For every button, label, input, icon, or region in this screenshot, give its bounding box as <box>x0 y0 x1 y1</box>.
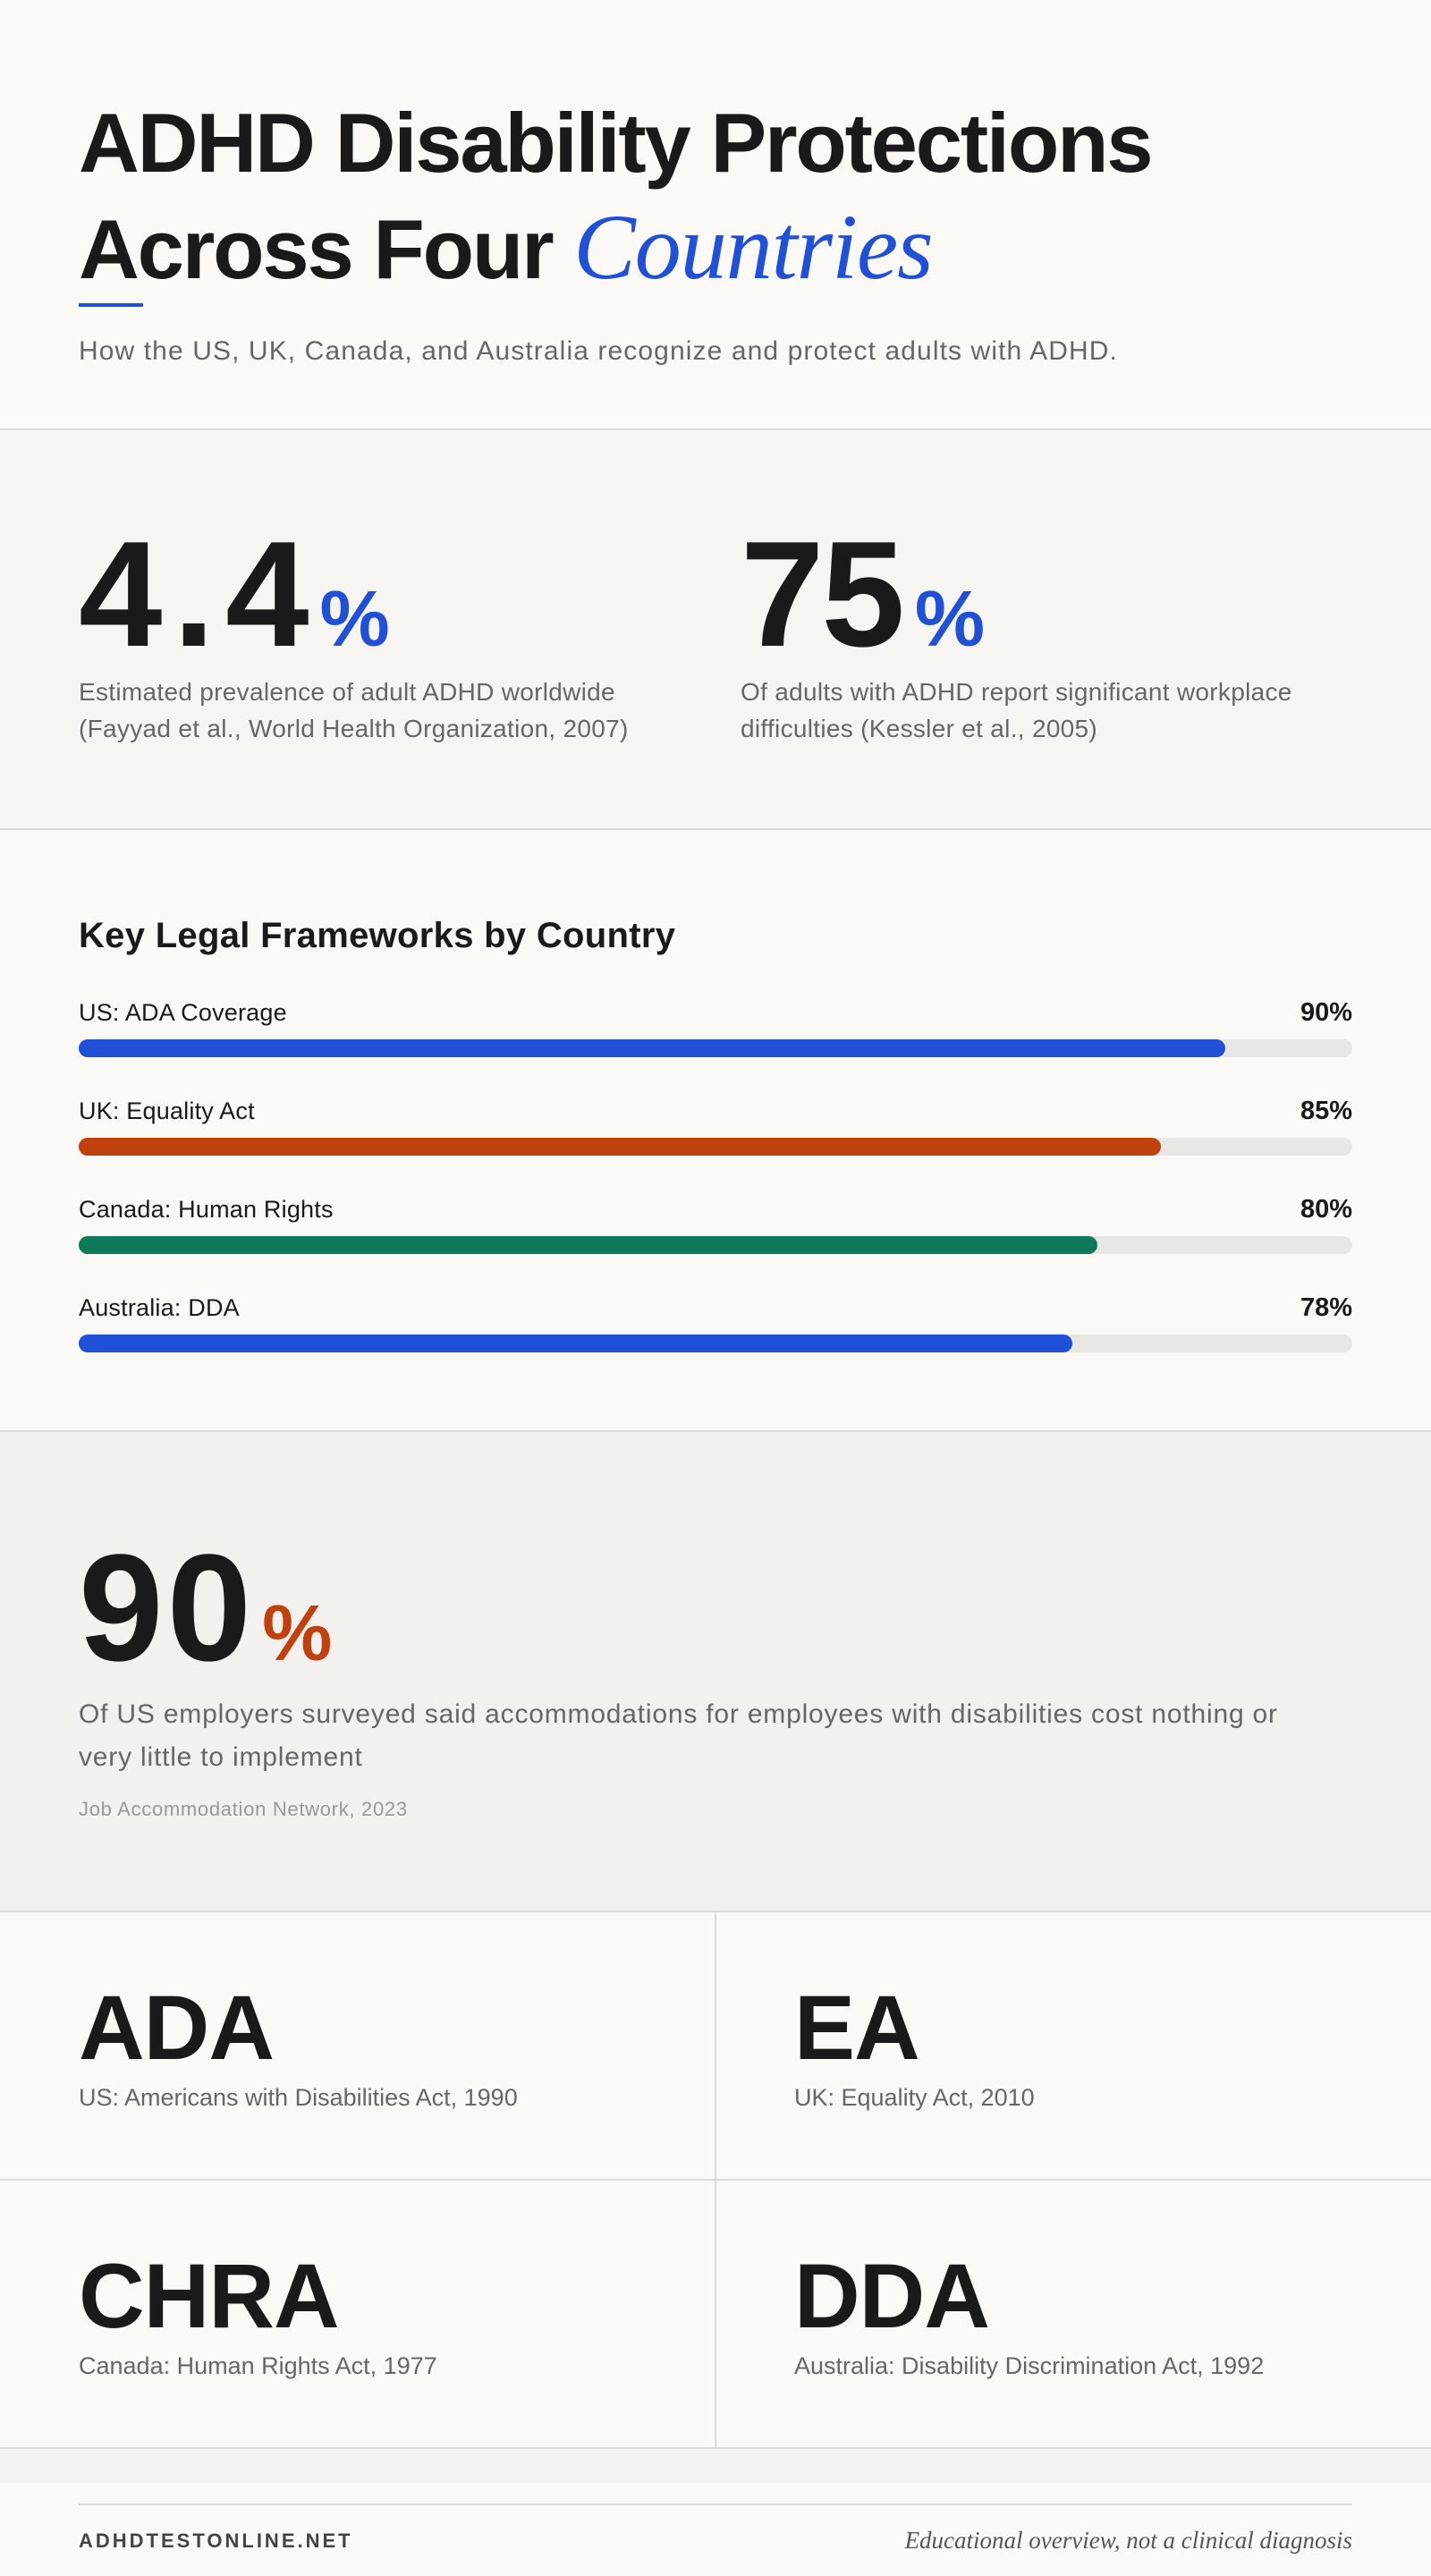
card: ADA <box>79 1977 518 2111</box>
card: CHRA: Canada: Human Rights Act, 1977 <box>79 2352 437 2379</box>
card: ADA: US: Americans with Disabilities Act, 1990 <box>79 2084 518 2111</box>
callout: 90% employers <box>79 1523 1278 1820</box>
bar: Australia DDA: Australia: DDA <box>79 1294 240 1321</box>
card: EA <box>794 1977 1035 2111</box>
card: DDA <box>794 2245 1264 2379</box>
card: DDA: DDA <box>794 2245 989 2347</box>
bar: Canada Human Rights: 80% <box>1300 1195 1352 1224</box>
callout: 90% employers: Of US employers surveyed said accommodations for employees with disabilities cost nothing or <box>79 1699 1278 1729</box>
bar: US ADA: US: ADA Coverage <box>79 999 287 1026</box>
card: CHRA <box>79 2245 437 2379</box>
card: EA: UK: Equality Act, 2010 <box>794 2084 1035 2111</box>
title: ADHD Disability Protections <box>79 96 1151 190</box>
card: DDA: Australia: Disability Discrimination Act, 1992 <box>794 2352 1264 2379</box>
title underline accent <box>79 303 143 307</box>
title: Across Four Countries <box>79 196 933 299</box>
stat: 4.4% prevalence: 4.4% <box>79 510 390 678</box>
bar: UK Equality Act: UK: Equality Act <box>79 1097 255 1124</box>
bar: US ADA: 90% <box>1300 998 1352 1027</box>
bar: Australia DDA <box>79 1293 1352 1352</box>
stat: 75% workplace: 75% <box>741 510 985 678</box>
stat: 75% workplace <box>741 510 1292 742</box>
callout panel background <box>0 1431 1431 1911</box>
bar chart <box>79 998 1352 1352</box>
card: ADA: ADA <box>79 1977 274 2079</box>
subtitle: How the US, UK, Canada, and Australia recognize and protect adults with ADHD. <box>79 336 1118 366</box>
callout: 90% employers: Job Accommodation Network, 2023 <box>79 1798 408 1820</box>
callout: 90% employers: very little to implement <box>79 1742 363 1772</box>
callout: 90% employers: 90% <box>79 1523 332 1693</box>
bar: Australia DDA: 78% <box>1300 1293 1352 1322</box>
title <box>79 96 1151 299</box>
chart heading: Key Legal Frameworks by Country <box>79 916 675 955</box>
bar: Canada Human Rights <box>79 1195 1352 1254</box>
card: EA: EA <box>794 1977 919 2079</box>
stat: 75% workplace: difficulties (Kessler et al., 2005) <box>741 715 1097 742</box>
bar: UK Equality Act <box>79 1097 1352 1156</box>
card: CHRA: CHRA <box>79 2245 339 2347</box>
footer: site name: ADHDTESTONLINE.NET <box>79 2529 353 2552</box>
bar: UK Equality Act: 85% <box>1300 1097 1352 1125</box>
stat: 4.4% prevalence <box>79 510 629 742</box>
stat: 4.4% prevalence: Estimated prevalence of adult ADHD worldwide <box>79 678 615 706</box>
bar: US ADA <box>79 998 1352 1057</box>
stat: 4.4% prevalence: (Fayyad et al., World Health Organization, 2007) <box>79 715 629 742</box>
stats panel background <box>0 429 1431 829</box>
stat: 75% workplace: Of adults with ADHD report significant workplace <box>741 678 1292 706</box>
bar: Canada Human Rights: Canada: Human Rights <box>79 1196 334 1223</box>
footer: disclaimer: Educational overview, not a clinical diagnosis <box>905 2527 1352 2554</box>
